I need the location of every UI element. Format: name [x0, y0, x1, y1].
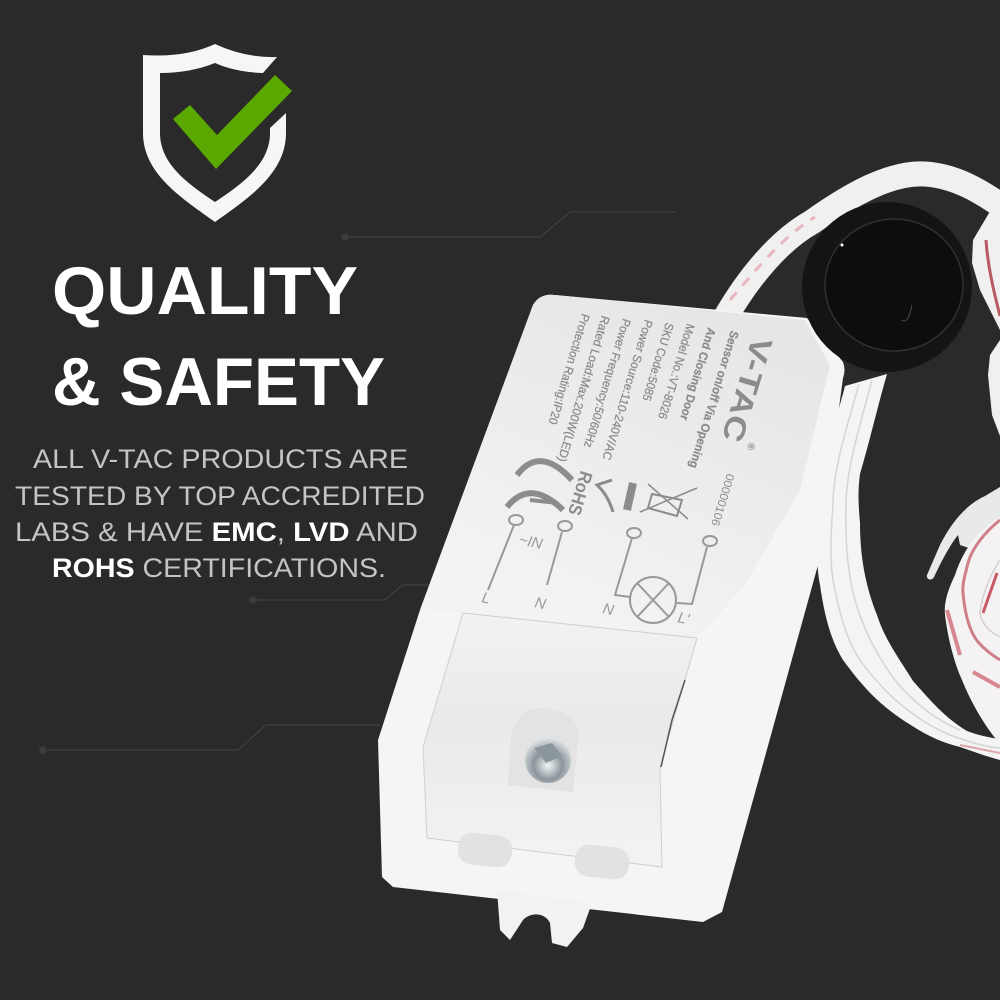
screw recess — [508, 708, 579, 792]
coil body — [945, 517, 1000, 740]
wiring labels: ~IN — [517, 531, 544, 553]
coil shading — [980, 560, 1000, 637]
wire: ribbon from sensor — [817, 374, 1000, 760]
product specification lines: SKU Code:5085 — [639, 321, 677, 403]
title: QUALITY — [52, 253, 358, 329]
title — [52, 253, 385, 420]
wire: right edge pieces — [972, 200, 1000, 436]
wiring labels: N — [601, 600, 615, 619]
coil red stripes — [963, 520, 1000, 660]
registered mark: ® — [744, 441, 757, 452]
body shell — [378, 295, 844, 922]
CE mark — [507, 461, 572, 510]
label print — [480, 312, 778, 628]
description text — [15, 444, 425, 583]
description text: ROHS CERTIFICATIONS. — [52, 553, 386, 583]
product specification lines: And Closing Door — [677, 326, 719, 422]
wire: coil at right edge — [927, 487, 1000, 740]
terminal cover — [423, 613, 697, 867]
mounting tab — [497, 890, 592, 947]
serial number: 00000106 — [708, 472, 736, 527]
product specification lines: Rated Load:Max.200W(LED) — [555, 314, 613, 464]
description text: TESTED BY TOP ACCREDITED — [15, 481, 425, 511]
wiring labels: L' — [676, 609, 692, 628]
terminal slots — [456, 831, 631, 881]
motion sensor — [802, 202, 972, 372]
product specification lines: Power Frequency:50/60Hz — [581, 317, 634, 449]
decorative circuit lines — [40, 212, 676, 753]
wire: upper loop — [725, 174, 1000, 318]
wiring labels: N — [533, 594, 547, 613]
title: & SAFETY — [52, 344, 385, 420]
product specification lines: Model No.:VT-8026 — [655, 322, 698, 421]
product specification lines: Power Source:110-240V/AC — [599, 318, 656, 462]
cover gap shadow — [661, 680, 685, 767]
loose wire tail — [927, 487, 1000, 579]
product specification lines: Protection Rating:IP20 — [545, 312, 593, 426]
logo: V-TAC — [715, 333, 778, 446]
device body — [378, 295, 844, 947]
RoHS mark: RoHS — [564, 469, 596, 518]
wiring labels — [480, 531, 692, 628]
wiring labels: L — [480, 589, 492, 608]
wiring diagram — [488, 515, 717, 623]
product specification lines: Sensor on/off Via Opening — [686, 329, 742, 470]
description text: ALL V-TAC PRODUCTS ARE — [33, 444, 408, 474]
product specification lines — [545, 312, 742, 470]
icon: shield with check mark — [143, 44, 292, 222]
recycling marks — [597, 480, 697, 519]
label face — [420, 295, 830, 638]
description text: LABS & HAVE EMC, LVD AND — [15, 517, 418, 547]
icon: screw — [525, 737, 571, 783]
